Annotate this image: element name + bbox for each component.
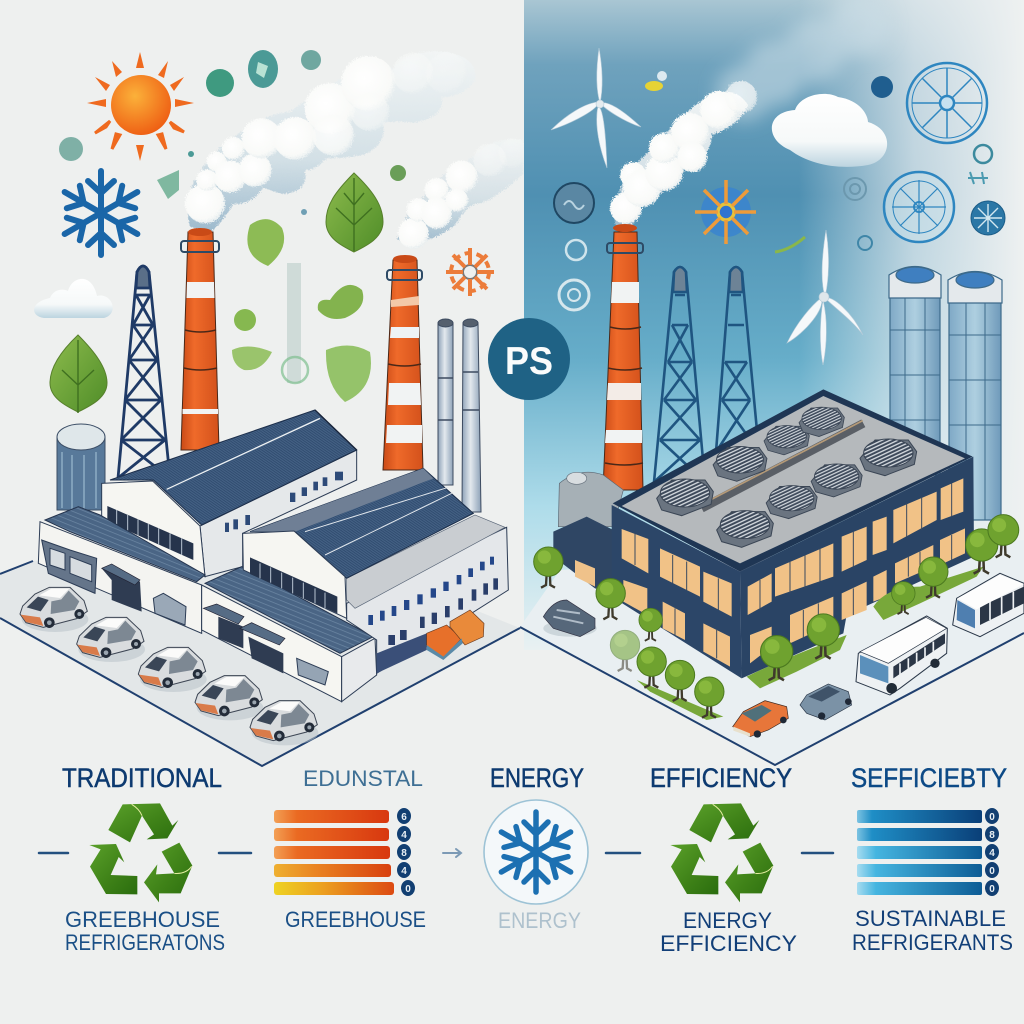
chart: blue bars: 0 [989,812,995,823]
building 2 side windows upper [368,557,494,625]
storage tank left [57,424,105,510]
building 2 grey flat roof [347,515,505,608]
chart: orange bars: 4 [401,866,407,877]
smoke: right plume [610,0,890,228]
wing B doors [203,604,328,685]
chimney: right [603,224,643,490]
building 1 side wall [200,450,357,577]
panel: efficient sky background [524,0,1024,650]
rooftop fans [657,407,917,547]
building 2 gable wall [243,531,347,618]
orange car [733,701,788,738]
chart: blue bars: 8 [989,830,995,841]
wing A wall [38,522,202,633]
building roof [613,389,973,572]
lattice towers right [654,267,759,482]
chart: orange bars: 8 [401,848,407,859]
icon: snowflake large [58,171,144,255]
lattice tower left [118,266,170,478]
grey service tank [558,472,623,527]
badge: PS: PS [505,340,553,383]
building 1 side windows [225,472,343,532]
icons: left pale rings on sky [554,71,805,310]
building 2 lower side wall [347,527,508,673]
caption: greenhouse: GREEBHOUSE [285,907,426,932]
wing A doors [42,540,186,625]
caption: greenhouse refrigerants left [65,907,225,955]
bus front [856,616,947,695]
heading: traditional: TRADITIONAL [62,763,222,793]
icon: leaf lower [50,335,107,413]
building 2 roof [250,468,473,578]
building left wall [612,505,742,678]
caption: energy efficiency [660,908,797,956]
chart: orange bars [274,808,415,896]
chart: blue bars: 0 [989,884,995,895]
icon: orange gear [446,248,494,296]
icons: faded green eco blobs [232,219,371,402]
building 2 side windows lower [388,578,498,645]
icon: recycle left [89,803,192,902]
chart: orange bars: 6 [401,812,407,823]
ground: right plot [520,540,1024,765]
caption: energy efficiency: ENERGY [683,908,772,933]
factory: traditional building [20,410,508,745]
ground: left plot [0,540,520,766]
chart: blue bars [857,808,999,896]
heading: energy: ENERGY [490,763,584,793]
caption: greenhouse refrigerants left: GREEBHOUSE [65,907,220,932]
wing B wall [202,585,342,702]
heading: edunstal: EDUNSTAL [303,766,423,791]
building 1 gable windows [107,506,193,560]
orange crates [427,610,484,660]
wing A roof [45,507,205,582]
icons: small teal badges top left [59,50,406,215]
building 1 ridge [167,418,320,489]
dash separators [39,849,833,857]
windows [622,478,965,667]
pipes: twin exhaust stacks [438,319,481,512]
building 1 gable wall [102,481,205,577]
caption: greenhouse refrigerants left: REFRIGERATONS [65,930,225,955]
badge: PS [488,318,570,400]
chart: blue bars: 4 [989,848,995,859]
chart: orange bars: 0 [405,884,411,895]
parked cars [20,587,318,745]
bus rear [953,573,1024,637]
icon: cloud right [772,94,887,167]
caption: energy efficiency: EFFICIENCY [660,931,797,956]
caption: sustainable refrigerants: REFRIGERANTS [852,930,1013,955]
caption: sustainable refrigerants [852,906,1013,955]
building right wall [740,457,974,678]
chimney: left two [383,255,423,470]
window mullions [635,483,952,658]
entrance block [553,517,613,593]
icon: snowflake badge [484,800,588,904]
icon: sun [87,52,194,161]
icon: colourful gear [695,180,756,244]
icon: cloud left [34,279,113,318]
heading: sefficiebty: SEFFICIEBTY [851,763,1007,793]
smoke: left stack one [185,51,475,232]
wing B roof [205,567,373,653]
grey car [543,600,597,637]
shrubs [637,567,983,720]
heading: efficiency: EFFICIENCY [650,763,792,793]
factory: efficient building [534,389,1024,738]
building 1 roof [110,410,357,525]
chimney: left one [181,228,219,450]
caption: energy faint: ENERGY [498,908,581,933]
smoke: left stack two [396,148,524,247]
trees [534,515,1019,718]
turbine: upper on blue sky [551,48,641,168]
roof duct [702,423,863,508]
icons: circular refrigeration badges [844,63,1005,250]
small blue car [800,684,852,720]
icon: recycle right [670,803,773,902]
caption: sustainable refrigerants: SUSTAINABLE [855,906,1006,931]
turbine: lower on blue sky [787,230,863,365]
icon: leaf upper [326,173,383,252]
chart: orange bars: 4 [401,830,407,841]
chart: blue bars: 0 [989,866,995,877]
glass cooling towers [889,266,1002,520]
